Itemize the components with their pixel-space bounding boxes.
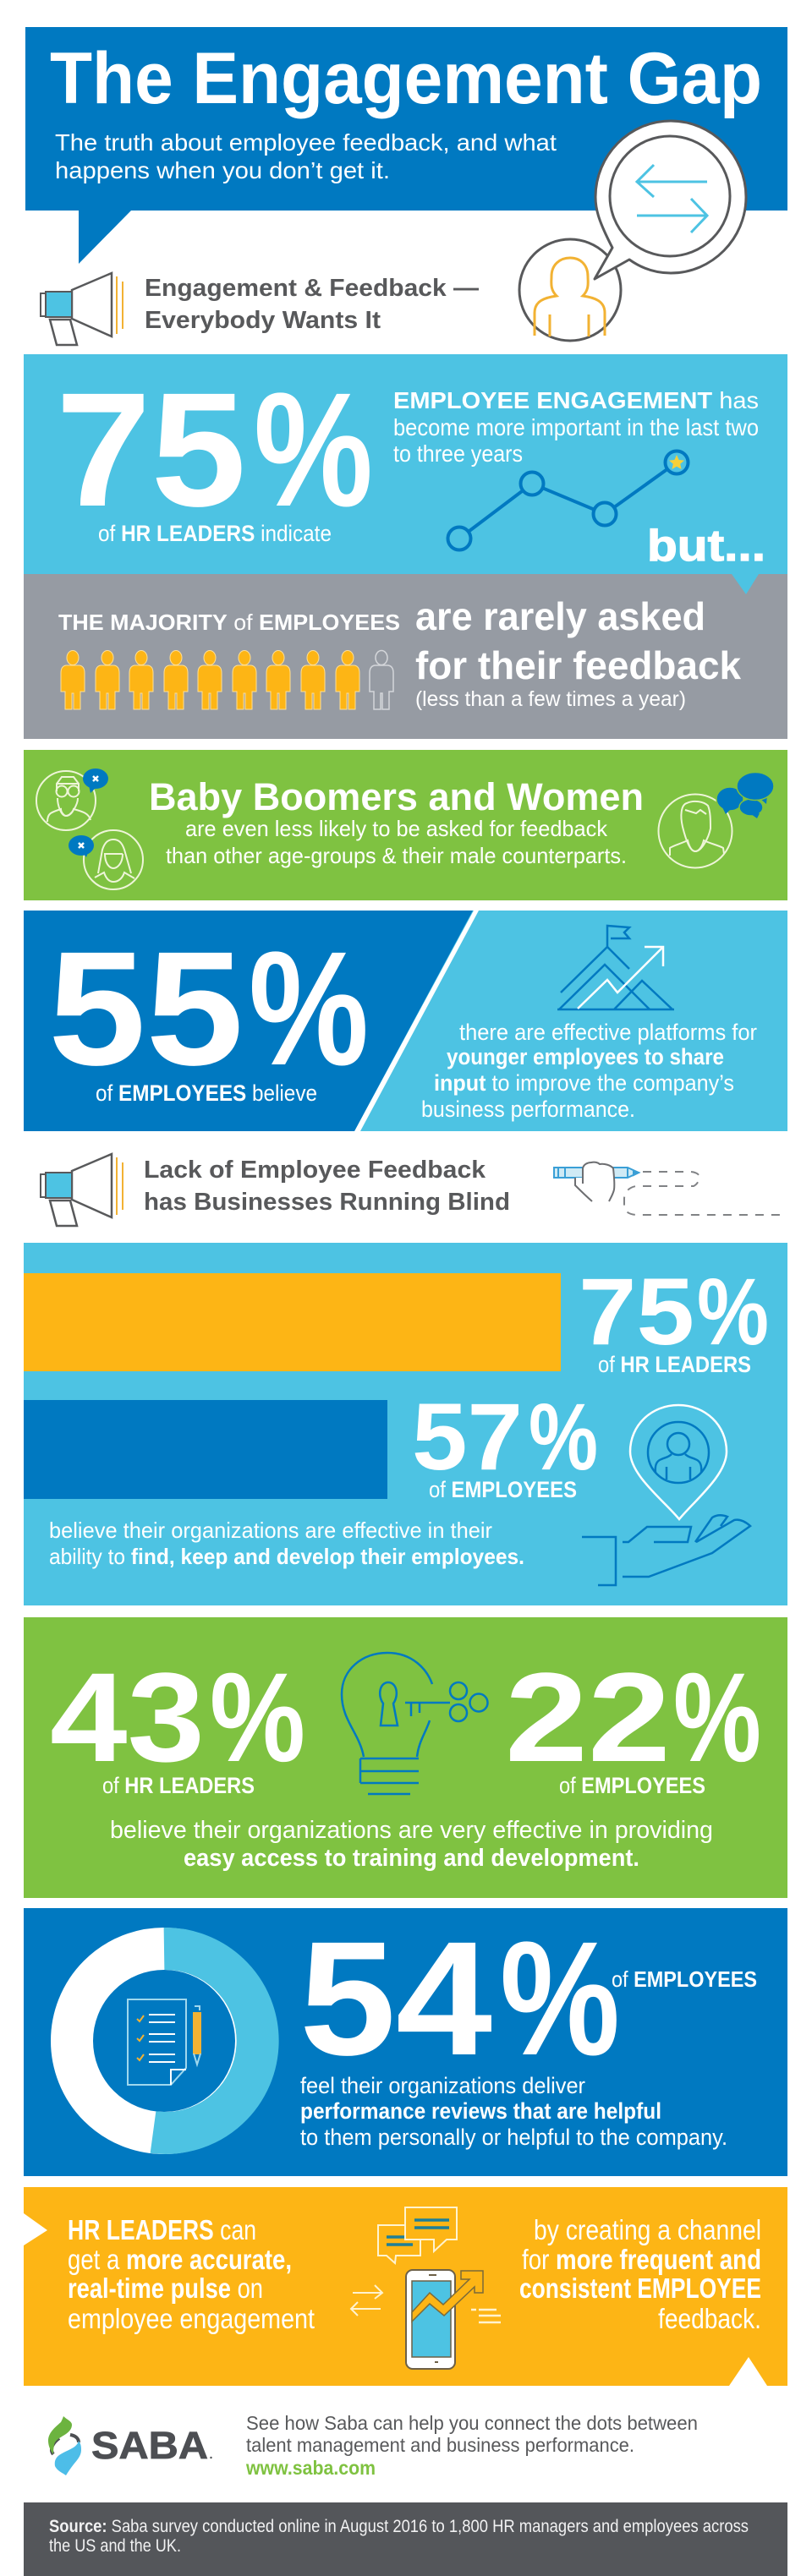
body text — [49, 1518, 524, 1569]
body text: than other age-groups & their male counterparts. — [166, 843, 627, 868]
left text: get a more accurate, — [68, 2244, 292, 2275]
subtitle: The truth about employee feedback, and what — [55, 129, 557, 156]
body text: input to improve the company’s — [434, 1070, 734, 1096]
big number 75% — [56, 358, 373, 540]
body text: there are effective platforms for — [459, 1020, 757, 1045]
body text: to them personally or helpful to the company. — [300, 2125, 727, 2150]
subtitle: happens when you don’t get it. — [55, 157, 390, 183]
engagement text: to three years — [393, 440, 523, 467]
icon: speech bubbles with person — [519, 121, 746, 341]
heading text — [145, 275, 479, 334]
donut chart 54% — [72, 1949, 258, 2133]
caption: of HR LEADERS indicate — [98, 521, 332, 546]
body text: ability to find, keep and develop their employees. — [49, 1544, 524, 1569]
panel: baby boomers and women — [24, 750, 787, 900]
engagement text: become more important in the last two — [393, 414, 759, 440]
left text: HR LEADERS can — [68, 2214, 256, 2245]
note: (less than a few times a year) — [415, 687, 686, 711]
stat 75%: % — [697, 1259, 769, 1365]
engagement text — [393, 387, 759, 467]
stat 22%: of EMPLOYEES — [559, 1773, 705, 1798]
right text: by creating a channel — [534, 2214, 761, 2245]
heading: Baby Boomers and Women — [149, 775, 644, 818]
line chart — [448, 451, 689, 550]
panel: 75% of HR leaders — [24, 354, 787, 574]
section heading: engagement and feedback — [41, 273, 479, 345]
big number 54% — [299, 1907, 620, 2089]
icon: megaphone — [41, 273, 123, 345]
engagement text: EMPLOYEE ENGAGEMENT has — [393, 387, 759, 413]
bar: 57% employees — [24, 1400, 387, 1499]
stat 57%: % — [529, 1384, 598, 1490]
stat 22%: % — [673, 1646, 761, 1788]
source text — [49, 2517, 749, 2556]
big number 55% — [48, 917, 369, 1099]
stat 43% — [50, 1646, 305, 1798]
title: The Engagement Gap — [50, 38, 762, 119]
panel: 55% of employees — [24, 911, 787, 1131]
stat 43%: of HR LEADERS — [102, 1773, 255, 1798]
body text: believe their organizations are very effective in providing — [110, 1817, 713, 1844]
stat 22%: 22 — [505, 1646, 671, 1788]
stat 57% — [412, 1384, 598, 1502]
headline — [415, 594, 741, 687]
stat 57%: 57 — [412, 1384, 523, 1490]
body text: believe their organizations are effective in their — [49, 1518, 492, 1543]
icon: megaphone — [41, 1154, 123, 1226]
heading text: Engagement & Feedback — — [145, 275, 479, 302]
stat 22% — [505, 1646, 761, 1798]
big number 75%: 75 — [56, 358, 246, 540]
stat 75% — [579, 1259, 769, 1377]
big number 55%: 55 — [48, 917, 244, 1099]
call to action text: www.saba.com — [245, 2457, 376, 2479]
big number 55%: % — [249, 917, 369, 1099]
left text — [68, 2214, 315, 2334]
headline: for their feedback — [415, 643, 741, 687]
icon: light bulb with key — [342, 1653, 487, 1794]
icon: hand drawing dashed path — [554, 1162, 782, 1215]
panel: training access — [24, 1617, 787, 1898]
body text — [300, 2073, 727, 2150]
stat 75%: 75 — [579, 1259, 694, 1365]
panel: source footer — [24, 2502, 787, 2576]
heading text: has Businesses Running Blind — [144, 1189, 510, 1216]
icon: woman — [69, 830, 143, 889]
pictogram: nine of ten people — [61, 651, 393, 709]
source text: the US and the UK. — [49, 2536, 181, 2556]
heading text: Lack of Employee Feedback — [144, 1157, 486, 1184]
panel: majority of employees — [24, 574, 787, 739]
left text: real-time pulse on — [68, 2272, 263, 2304]
heading text: Everybody Wants It — [145, 307, 381, 334]
body text: easy access to training and development. — [184, 1845, 639, 1872]
icon: smartphone with rising arrow — [406, 2270, 483, 2369]
body text: younger employees to share — [447, 1044, 724, 1069]
wordmark: SABA — [91, 2424, 208, 2467]
call to action text: talent management and business performance. — [246, 2434, 634, 2456]
icon: mountains with arrow — [557, 926, 674, 1009]
speech tail — [732, 574, 759, 594]
body text: feel their organizations deliver — [300, 2073, 585, 2098]
panel: recommendation — [24, 2187, 787, 2386]
stat 57%: of EMPLOYEES — [429, 1477, 577, 1502]
headline: are rarely asked — [415, 594, 705, 638]
stat 43%: 43 — [50, 1646, 205, 1788]
icon: man with glasses — [36, 768, 108, 830]
right text — [519, 2214, 761, 2334]
icon: location pin with person over hand — [582, 1405, 750, 1585]
heading text — [144, 1157, 510, 1216]
big number 75%: % — [254, 358, 373, 540]
panel: performance reviews — [24, 1907, 787, 2176]
body text — [166, 816, 627, 868]
label: THE MAJORITY of EMPLOYEES — [58, 610, 400, 635]
panel: header — [25, 27, 787, 264]
icon: man with speech bubbles — [658, 773, 774, 867]
caption: of EMPLOYEES — [612, 1966, 757, 1992]
stat 75%: of HR LEADERS — [598, 1352, 751, 1377]
bar: 75% HR leaders — [24, 1273, 561, 1371]
right text: for more frequent and — [522, 2244, 761, 2275]
icon: exchange arrows — [351, 2285, 382, 2316]
stat 43%: % — [210, 1646, 305, 1788]
subtitle — [55, 129, 557, 183]
caption: of EMPLOYEES believe — [96, 1080, 317, 1106]
call to action text: See how Saba can help you connect the dots between — [246, 2412, 698, 2434]
body text: performance reviews that are helpful — [300, 2098, 661, 2124]
body text: business performance. — [421, 1097, 635, 1122]
body text — [110, 1817, 713, 1872]
but...: but... — [647, 522, 765, 571]
panel: effectiveness bars — [24, 1243, 787, 1605]
icon: list lines — [471, 2310, 501, 2322]
call to action text — [245, 2412, 698, 2479]
Saba logo — [48, 2416, 212, 2475]
left text: employee engagement — [68, 2303, 315, 2334]
section heading: lack of employee feedback — [41, 1154, 510, 1226]
right text: feedback. — [658, 2303, 761, 2334]
icon: checklist and pencil — [128, 1999, 200, 2085]
big number 54%: % — [500, 1907, 620, 2089]
body text: are even less likely to be asked for feedback — [185, 816, 608, 841]
icon: speech bubbles — [378, 2207, 457, 2263]
body text — [421, 1020, 757, 1122]
big number 54%: 54 — [299, 1907, 492, 2089]
